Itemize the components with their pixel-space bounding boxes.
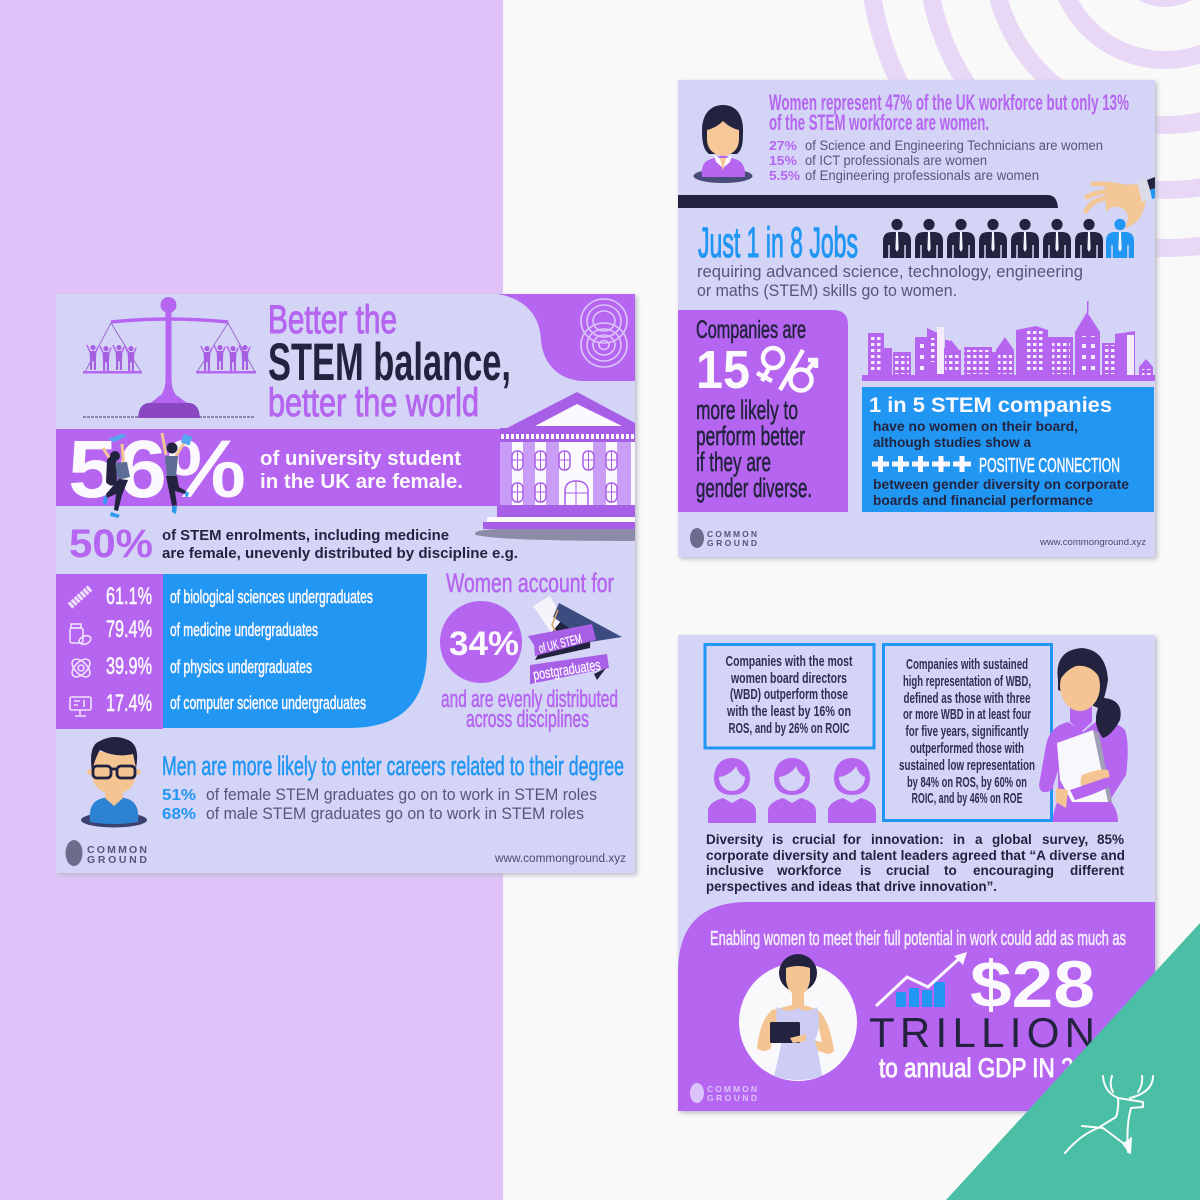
logo: common ground: GROUND: [707, 1093, 757, 1103]
statistic: men careers: of male STEM graduates go on to work in STEM roles: [206, 805, 584, 823]
icons: three women: [708, 758, 876, 823]
background: lilac left half: [0, 0, 503, 1200]
panel: 15 percent gender diverse: 15: [696, 340, 750, 400]
icon: white stag logo: [1065, 1076, 1153, 1153]
decorative concentric rings: [869, 0, 1200, 248]
title: better the world: [268, 381, 479, 425]
text box: sustained high representation: for five years, significantly: [906, 723, 1029, 740]
number: 28 trillion: TRILLION: [869, 1009, 1095, 1056]
logo: common ground: GROUND: [87, 854, 147, 866]
chart: rising arrow and bars: [876, 952, 967, 1007]
statistic: men careers: [162, 751, 624, 823]
text box: most women board directors: with the least by 16% on: [726, 703, 851, 720]
panel: discipline list: of physics undergraduates: [170, 657, 312, 677]
statistic: men careers: 68%: [162, 806, 196, 823]
statistic: men careers: of female STEM graduates go on to work in STEM roles: [206, 786, 597, 804]
panel: women in the workforce: [678, 80, 1157, 559]
purple corner with infinity logo: [498, 294, 635, 381]
text: diversity is crucial for innovation: encouraging: [973, 863, 1054, 878]
panel: 1 in 5 STEM companies: boards and financial performance: [873, 493, 1093, 508]
callout: women account for 34 percent: Women account for: [446, 568, 614, 598]
band: 56 percent of students: [56, 424, 502, 515]
icon: scroll and graduation cap: of UK STEM: [537, 631, 583, 656]
text: diversity is crucial for innovation: innovation:: [871, 832, 944, 847]
text box: sustained high representation: ROIC, and by 46% on ROE: [912, 790, 1022, 807]
logo: common ground: GROUND: [707, 538, 757, 548]
statistic: 50 percent of STEM enrolments: 50%: [69, 522, 153, 566]
text: STEM skills: requiring advanced science, technology, engineering: [697, 262, 1083, 281]
statistics list: of Science and Engineering Technicians are women: [805, 138, 1103, 153]
text box: sustained high representation: outperformed those with: [910, 740, 1024, 757]
text: diversity is crucial for innovation: crucial: [886, 863, 930, 878]
website url: www.commonground.xyz: [1039, 537, 1146, 548]
illustration: university building: [475, 392, 635, 541]
text: diversity is crucial for innovation: global: [992, 832, 1032, 847]
panel: 28 trillion: [678, 902, 1155, 1111]
band: 56 percent of students: of university student: [260, 447, 461, 470]
panel: discipline list: of biological sciences undergraduates: [170, 587, 373, 607]
text box: sustained high representation: [884, 644, 1052, 820]
text: diversity is crucial for innovation: is: [772, 832, 783, 847]
icon: atom: [69, 656, 93, 680]
panel: 15 percent gender diverse: more likely to: [696, 395, 798, 425]
statistics list: of ICT professionals are women: [805, 153, 987, 168]
text box: sustained high representation: sustained low representation: [899, 757, 1035, 774]
statistics list: 5.5%: [769, 168, 800, 183]
band: 56 percent of students: in the UK are female.: [260, 470, 463, 493]
text: diversity is crucial for innovation: is: [860, 863, 871, 878]
icon: woman avatar: [694, 105, 752, 183]
panel: 15 percent gender diverse: [678, 310, 848, 512]
statistic: men careers: Men are more likely to enter careers related to their degree: [162, 751, 624, 781]
heading: women represent 47 percent: [769, 90, 1129, 135]
text: STEM skills: [697, 262, 1083, 300]
panel: discipline list: [56, 574, 427, 729]
logo: common ground: [690, 1083, 757, 1103]
statistic: 50 percent of STEM enrolments: of STEM enrolments, including medicine: [162, 528, 449, 544]
statistic: 50 percent of STEM enrolments: are female, unevenly distributed by discipline e.g.: [162, 546, 518, 562]
panel: 15 percent gender diverse: if they are: [696, 447, 771, 477]
illustration: woman holding book: [1039, 648, 1128, 822]
panel: 1 in 5 STEM companies: 1 in 5 STEM companies: [869, 394, 1112, 417]
panel: 1 in 5 STEM companies: [862, 387, 1154, 512]
callout: women account for 34 percent: and are evenly distributed: [441, 686, 618, 713]
logo: common ground: COMMON: [707, 529, 757, 539]
icon: scroll and graduation cap: [528, 596, 622, 684]
heading: women represent 47 percent: of the STEM workforce are women.: [769, 110, 989, 135]
callout: women account for 34 percent: across disciplines: [466, 706, 589, 733]
text box: sustained high representation: Companies with sustained: [906, 656, 1028, 673]
logo: common ground: [690, 528, 757, 548]
illustration: jumping students: [103, 433, 192, 518]
title: STEM balance,: [268, 333, 511, 392]
text box: most women board directors: [705, 644, 874, 748]
panel: 1 in 5 STEM companies: have no women on their board,: [873, 419, 1078, 434]
logo: common ground: COMMON: [87, 844, 147, 856]
text: diversity is crucial for innovation: 85%: [1097, 832, 1124, 847]
text box: most women board directors: (WBD) outperform those: [730, 686, 848, 703]
text box: sustained high representation: by 84% on ROS, by 60% on: [907, 774, 1027, 791]
text: diversity is crucial for innovation: workforce: [776, 863, 842, 878]
text: diversity is crucial for innovation: Diversity: [706, 832, 764, 847]
callout: women account for 34 percent: [440, 568, 622, 733]
website url: www.commonground.xyz: [494, 853, 626, 865]
panel: 15 percent gender diverse: perform better: [696, 421, 805, 451]
panel: discipline list: of computer science undergraduates: [170, 693, 366, 713]
icon: balance scale with people: [83, 297, 256, 418]
number: 28 trillion: $28: [970, 947, 1095, 1021]
icon: DNA: [70, 588, 90, 606]
text: diversity is crucial for innovation: crucial: [792, 832, 836, 847]
text: diversity is crucial for innovation: inclusive: [706, 863, 764, 878]
panel: 15 percent gender diverse: Companies are: [696, 316, 806, 344]
panel: discipline list: 61.1%: [106, 583, 152, 610]
panel: 1 in 5 STEM companies: between gender diversity on corporate: [873, 477, 1129, 492]
logo: common ground: COMMON: [707, 1084, 757, 1094]
band: 56 percent of students: 56%: [68, 424, 246, 515]
text: diversity is crucial for innovation: survey,: [1042, 832, 1088, 847]
title: [268, 298, 511, 425]
icon: five plus signs: [872, 456, 971, 472]
panel: better the STEM balance: [56, 294, 637, 875]
panel: 1 in 5 STEM companies: although studies show a: [873, 435, 1031, 450]
text: diversity is crucial for innovation: a: [975, 832, 983, 847]
text: diversity is crucial for innovation: to: [944, 863, 957, 878]
text: diversity is crucial for innovation: perspectives and ideas that drive innovation”.: [706, 879, 997, 894]
dark divider bar: [678, 195, 1058, 208]
logo: common ground: [66, 840, 147, 866]
text box: most women board directors: women board directors: [730, 670, 847, 687]
icon: gender percent sign: [757, 348, 816, 390]
text: diversity is crucial for innovation: corporate diversity and talent leaders agreed that “A diverse and: [706, 848, 1125, 863]
statistics list: of Engineering professionals are women: [805, 168, 1039, 183]
text: diversity is crucial for innovation: [706, 832, 1125, 894]
icon: scroll and graduation cap: postgraduates: [532, 657, 602, 684]
statistics list: 15%: [769, 153, 797, 168]
panel: discipline list: 17.4%: [106, 690, 152, 717]
text box: most women board directors: ROS, and by 26% on ROIC: [728, 720, 850, 737]
icon: hand picking worker: [1086, 177, 1155, 228]
text: STEM skills: or maths (STEM) skills go to women.: [697, 281, 957, 300]
text box: sustained high representation: or more WBD in at least four: [903, 706, 1031, 723]
number: 28 trillion: to annual GDP IN 2025: [879, 1053, 1111, 1083]
statistic: 50 percent of STEM enrolments: [69, 522, 518, 566]
text: diversity is crucial for innovation: for: [843, 832, 862, 847]
heading: just 1 in 8 jobs: Just 1 in 8 Jobs: [698, 219, 858, 267]
callout: women account for 34 percent: 34%: [449, 625, 519, 663]
text box: sustained high representation: defined as those with three: [904, 690, 1030, 707]
statistics list: 27%: [769, 138, 797, 153]
icon: medicine: [70, 624, 92, 646]
title: Better the: [268, 298, 397, 342]
panel: diversity and board directors: [678, 635, 1157, 1113]
icon: computer: [70, 697, 91, 716]
panel: 15 percent gender diverse: gender diverse.: [696, 473, 812, 503]
panel: discipline list: of medicine undergraduates: [170, 620, 318, 640]
illustration: woman with tablet: [739, 954, 857, 1081]
statistics list: [769, 138, 1103, 183]
panel: discipline list: 79.4%: [106, 616, 152, 643]
text: diversity is crucial for innovation: in: [953, 832, 965, 847]
text box: most women board directors: Companies with the most: [726, 653, 853, 670]
text: diversity is crucial for innovation: different: [1070, 863, 1125, 878]
illustration: city skyline: [862, 301, 1155, 381]
pictogram: eight workers: [883, 219, 1134, 258]
text box: sustained high representation: high representation of WBD,: [903, 673, 1031, 690]
teal corner triangle: [946, 923, 1200, 1200]
icon: man with glasses: [81, 737, 147, 828]
statistic: men careers: 51%: [162, 787, 196, 804]
panel: discipline list: 39.9%: [106, 653, 152, 680]
number: 28 trillion: [869, 947, 1111, 1083]
